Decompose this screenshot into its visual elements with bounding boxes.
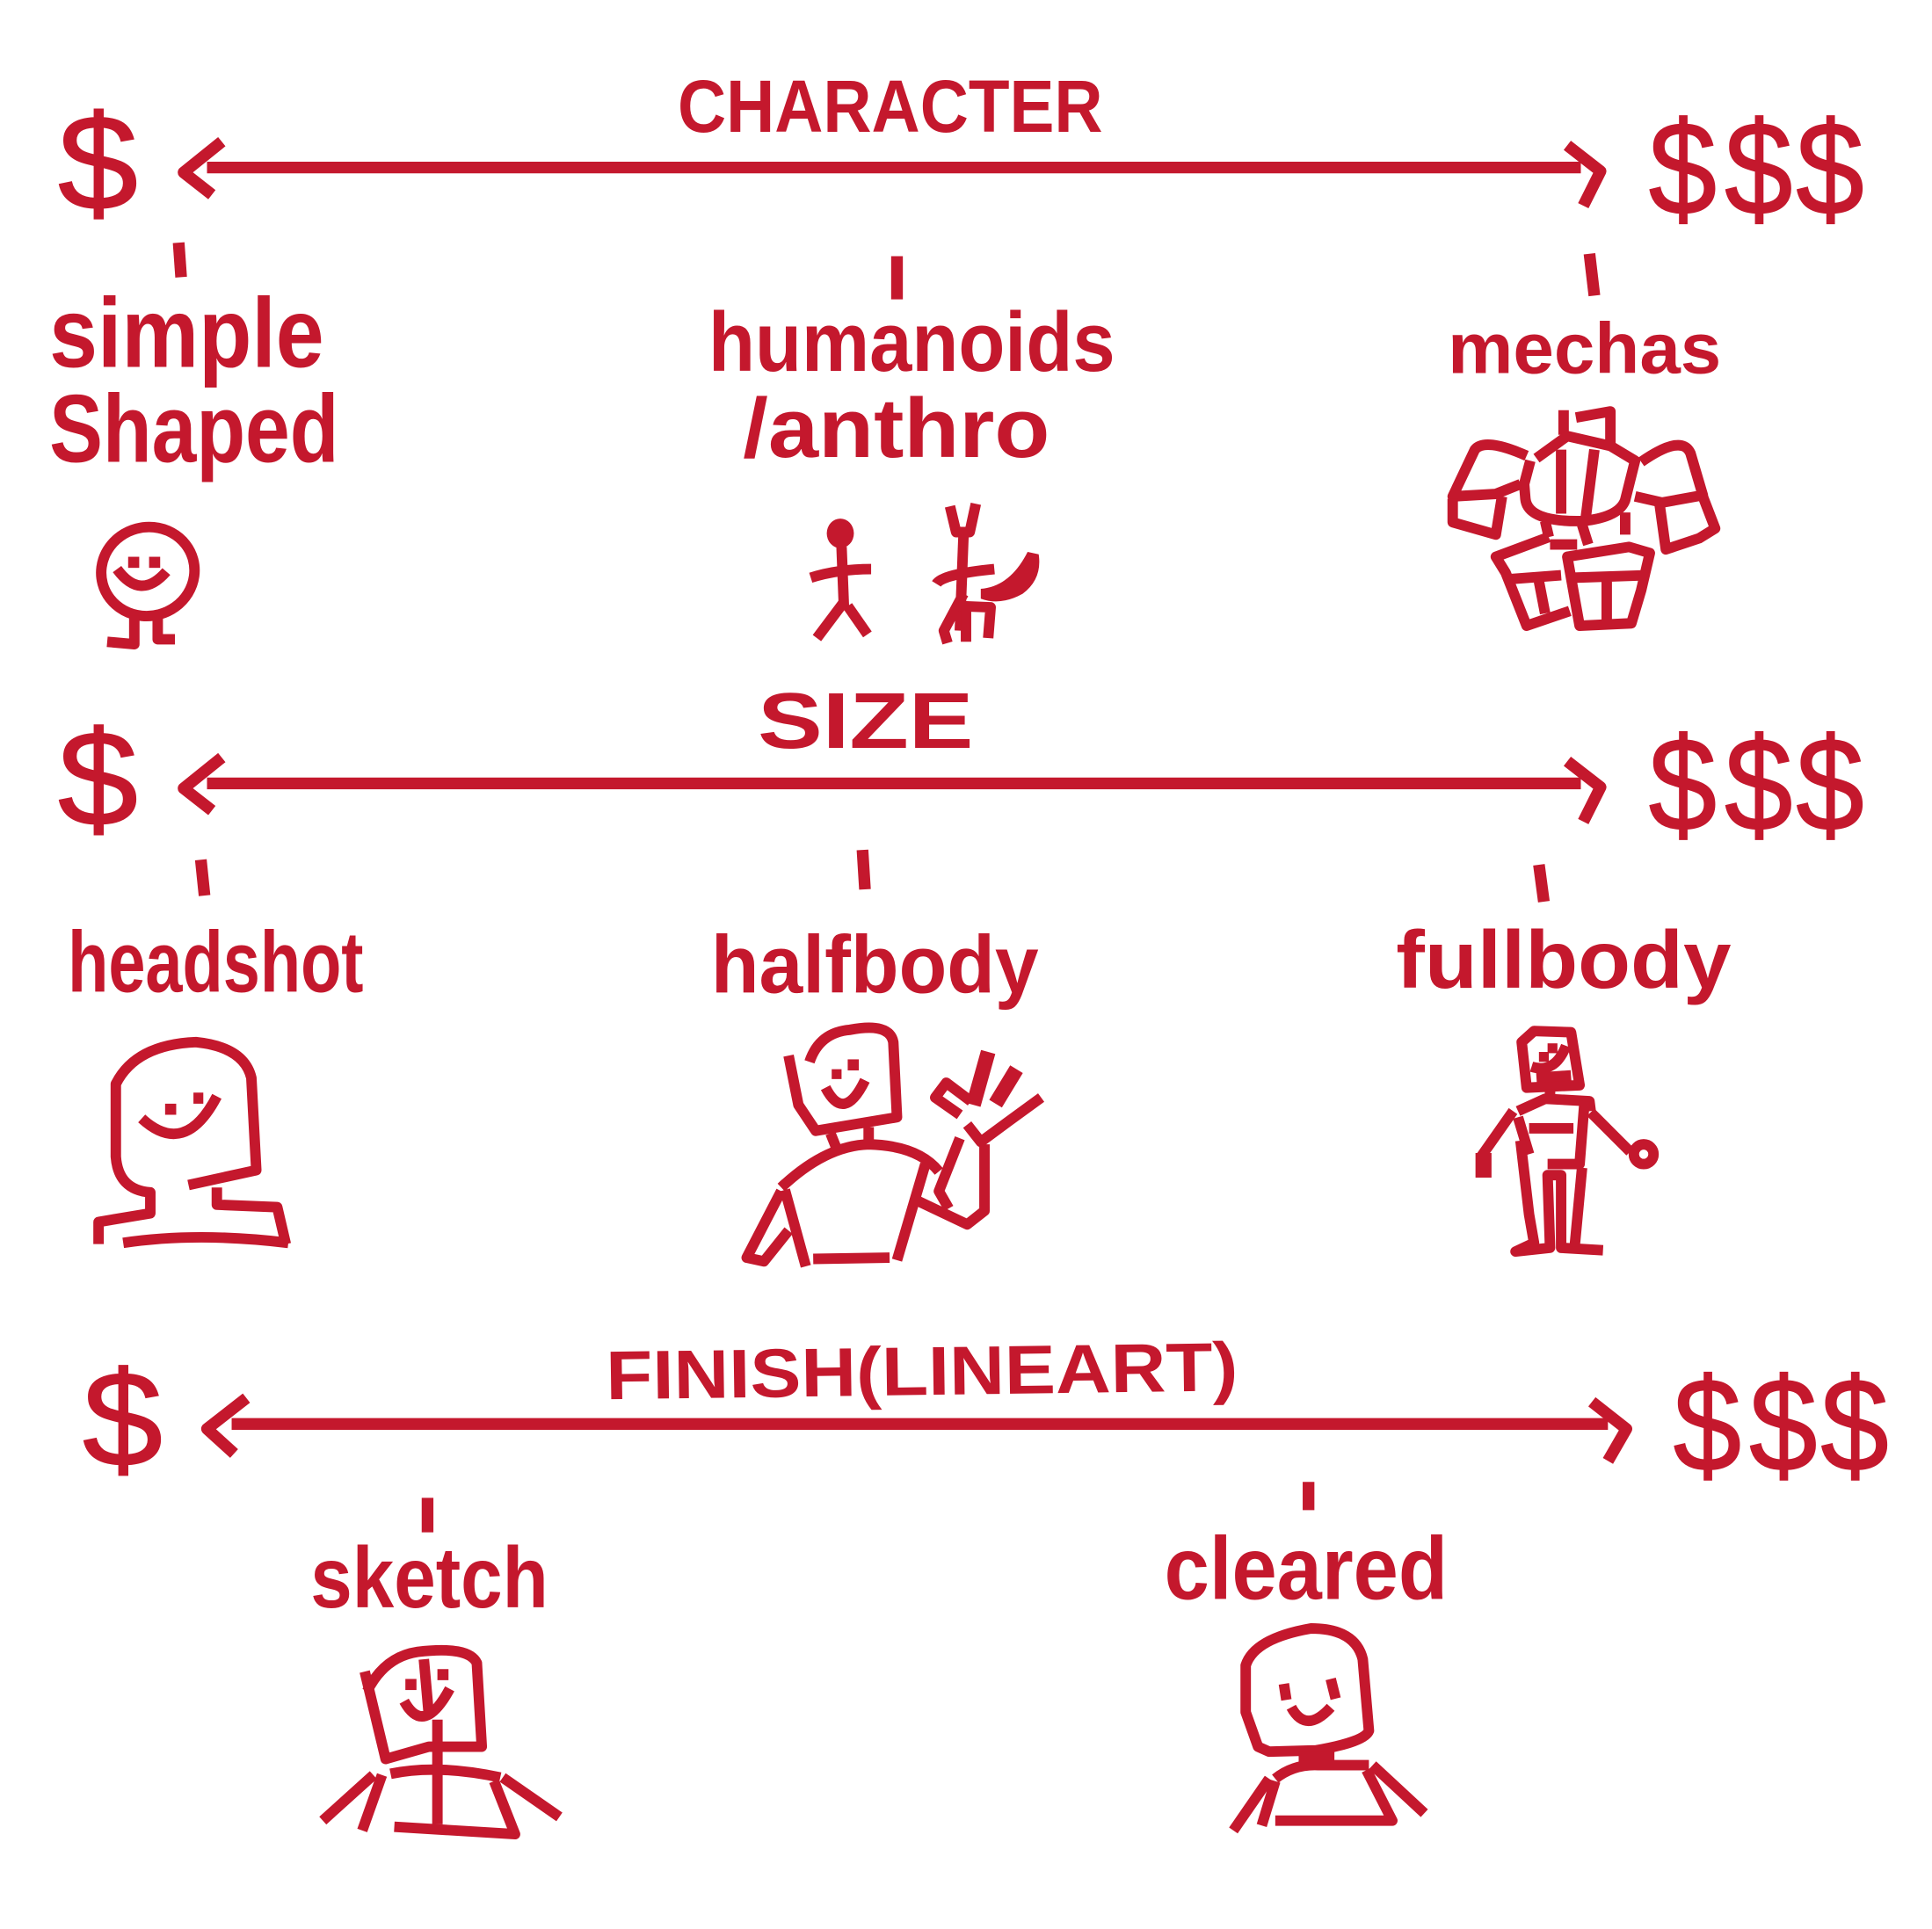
double-headed arrow xyxy=(184,758,1601,822)
low price symbol: $ xyxy=(58,702,138,854)
icon: headshot figure xyxy=(98,1042,288,1244)
tick: simple shaped xyxy=(178,243,181,277)
panel: finish (lineart) scale xyxy=(83,1328,1889,1834)
label: simple shaped: simple xyxy=(49,278,324,388)
tick: sketch xyxy=(424,1498,432,1533)
label: fullbody: fullbody xyxy=(1396,914,1732,1005)
low price symbol: $ xyxy=(58,86,138,238)
label: humanoids / anthro xyxy=(708,296,1115,475)
double-headed arrow xyxy=(207,1398,1626,1461)
icon: stick human xyxy=(810,519,871,638)
label: humanoids / anthro: humanoids xyxy=(708,296,1115,389)
label: mechas: mechas xyxy=(1448,309,1721,389)
panel: size scale xyxy=(58,678,1864,1266)
tick: cleared xyxy=(1304,1482,1312,1510)
high price symbols: $$$ xyxy=(1674,1350,1889,1499)
label: simple shaped xyxy=(49,278,338,483)
panel: character scale xyxy=(49,65,1864,644)
high price symbols: $$$ xyxy=(1649,94,1864,243)
low price symbol: $ xyxy=(83,1343,163,1495)
tick: humanoids xyxy=(893,257,901,300)
label: halfbody: halfbody xyxy=(711,919,1039,1011)
label: simple shaped: Shaped xyxy=(49,376,338,483)
label: humanoids / anthro: /anthro xyxy=(743,382,1050,475)
tick: fullbody xyxy=(1539,865,1543,902)
tick: mechas xyxy=(1589,254,1594,295)
icon: mecha xyxy=(1453,410,1715,626)
heading: character: CHARACTER xyxy=(678,65,1103,148)
icon: simple smiley figure xyxy=(91,517,205,644)
heading: finish (lineart): FINISH(LINEART) xyxy=(606,1328,1238,1414)
icon: cleared figure xyxy=(1233,1628,1424,1831)
label: cleared: cleared xyxy=(1165,1519,1448,1618)
heading: size: SIZE xyxy=(758,678,973,765)
icon: stick anthro with tail xyxy=(936,504,1039,643)
icon: sketch figure xyxy=(323,1650,559,1834)
label: sketch: sketch xyxy=(310,1529,548,1626)
icon: halfbody waving figure xyxy=(746,1027,1042,1266)
tick: halfbody xyxy=(862,850,865,889)
label: headshot: headshot xyxy=(68,913,364,1010)
double-headed arrow xyxy=(184,141,1601,206)
high price symbols: $$$ xyxy=(1649,709,1864,859)
tick: headshot xyxy=(200,859,205,896)
icon: fullbody figure xyxy=(1481,1031,1653,1251)
